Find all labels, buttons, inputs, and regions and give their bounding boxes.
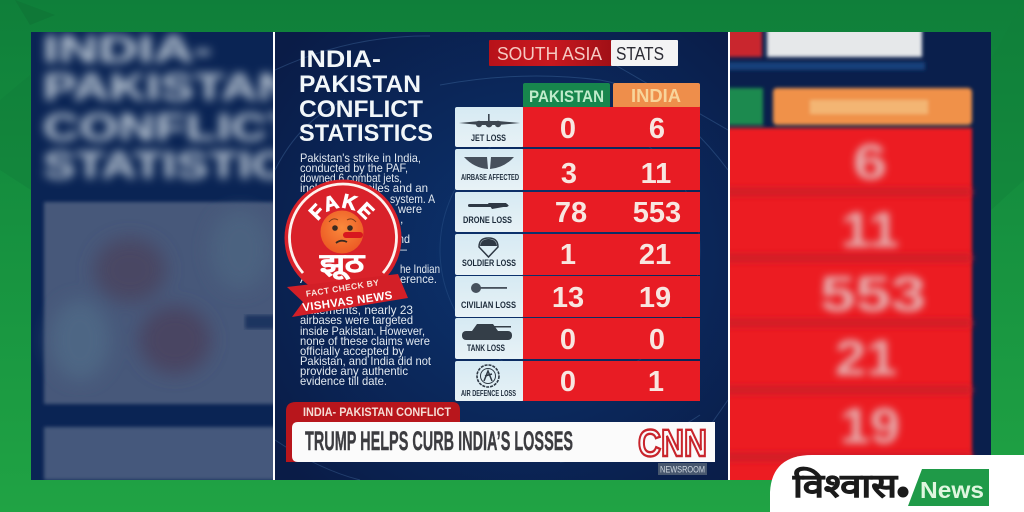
body text: , <box>400 212 403 226</box>
lower third news banner: INDIA- PAKISTAN CONFLICT <box>303 407 451 419</box>
body text: downed 6 combat jets, <box>300 171 402 185</box>
lower third news banner <box>286 402 715 475</box>
blurred right panel: 21 <box>835 330 897 386</box>
table row: jet loss <box>455 107 700 147</box>
column header: pakistan <box>523 83 610 108</box>
table row: jet loss: 0 <box>560 113 576 145</box>
hindi word: jhooth: झूठ <box>319 248 366 280</box>
blurred right panel: 553 <box>820 266 926 322</box>
blurred right panel: 11 <box>841 202 899 258</box>
body text: statements, nearly 23 <box>300 303 413 317</box>
table row: airbase affected: AIRBASE AFFECTED <box>461 173 519 182</box>
lower third news banner: TRUMP HELPS CURB INDIA’S LOSSES <box>305 426 573 456</box>
body text: were <box>397 202 422 216</box>
blurred left panel: PAKISTAN <box>43 67 294 109</box>
hindi wordmark: विश्वास <box>792 466 899 505</box>
body text: A <box>300 272 308 286</box>
blurred right panel <box>725 28 991 488</box>
icon: liar face <box>320 210 364 254</box>
body text: he Indian <box>400 262 440 276</box>
body text: evidence till date. <box>300 374 387 388</box>
body text <box>300 151 440 388</box>
body text: including missiles and an <box>300 181 428 195</box>
fake stamp badge <box>284 180 402 284</box>
table row: airbase affected: 11 <box>641 158 671 190</box>
table row: jet loss: 6 <box>649 113 665 145</box>
table row: air defence loss: AIR DEFENCE LOSS <box>461 389 516 398</box>
body text: officially accepted by <box>300 344 404 358</box>
blurred left panel: INDIA- <box>43 29 212 71</box>
column header: pakistan: PAKISTAN <box>529 87 604 106</box>
table row: civilian loss: 13 <box>552 282 584 314</box>
newsroom tag: NEWSROOM <box>660 464 705 474</box>
icon: tank <box>462 324 512 340</box>
body text: conducted by the PAF, <box>300 161 408 175</box>
table row: civilian loss <box>455 276 700 317</box>
table row: civilian loss: CIVILIAN LOSS <box>461 300 516 310</box>
table row: soldier loss <box>455 234 700 275</box>
table row: drone loss: DRONE LOSS <box>463 215 512 225</box>
curved word: fake: FAKE <box>308 194 376 221</box>
table row: tank loss <box>455 318 700 359</box>
icon: helmet <box>479 238 498 257</box>
body text: Pakistan's strike in India, <box>300 151 421 165</box>
table row: airbase affected: 3 <box>561 158 577 190</box>
icon: shell <box>471 283 507 293</box>
body text: erence. <box>400 272 437 286</box>
ribbon: fact check by vishvas news: VISHVAS NEWS <box>302 290 393 314</box>
south asia stats banner: SOUTH ASIA <box>497 43 603 64</box>
table row: air defence loss <box>455 361 700 401</box>
title: STATISTICS <box>299 120 433 147</box>
ribbon: fact check by vishvas news <box>287 274 408 317</box>
table row: tank loss: 0 <box>649 324 665 356</box>
table row: air defence loss: 0 <box>560 366 576 398</box>
blurred right panel: 6 <box>853 134 887 190</box>
body text: nd <box>398 232 410 246</box>
blurred left panel: STATISTICS <box>43 145 319 187</box>
table row: soldier loss: 1 <box>560 239 576 271</box>
news tag <box>908 469 989 506</box>
table row: soldier loss: 21 <box>639 239 671 271</box>
title: CONFLICT <box>299 96 423 123</box>
icon: air defence emblem <box>477 365 499 387</box>
body text: airbases were targeted <box>300 313 413 327</box>
table row: drone loss: 78 <box>555 197 587 229</box>
body text: provide any authentic <box>300 364 408 378</box>
table row: drone loss: 553 <box>633 197 681 229</box>
body text: Pakistan, and India did not <box>300 354 432 368</box>
icon: wings <box>464 157 514 169</box>
vishvas news logo <box>770 455 1024 512</box>
table row: tank loss: 0 <box>560 324 576 356</box>
body text: inside Pakistan. However, <box>300 324 425 338</box>
table row: airbase affected <box>455 149 700 190</box>
table row: soldier loss: SOLDIER LOSS <box>462 258 516 268</box>
table row: tank loss: TANK LOSS <box>467 343 505 353</box>
blurred left panel <box>31 32 273 480</box>
title <box>299 46 433 147</box>
table row: jet loss: JET LOSS <box>471 133 506 143</box>
table row: air defence loss: 1 <box>648 366 664 398</box>
blurred left panel: CONFLICT <box>43 107 298 149</box>
white divider lines and center infographic <box>273 32 730 480</box>
table row: civilian loss: 19 <box>639 282 671 314</box>
news tag: News <box>920 477 984 503</box>
blurred right panel: 19 <box>840 398 900 454</box>
south asia stats banner <box>489 40 678 66</box>
ribbon: fact check by vishvas news: FACT CHECK BY <box>305 277 380 299</box>
body text: none of these claims were <box>300 334 430 348</box>
column header: india: INDIA <box>631 86 681 106</box>
south asia stats banner: STATS <box>616 43 664 64</box>
table row: drone loss <box>455 192 700 232</box>
icon: drone <box>468 203 509 209</box>
body text: — <box>399 242 407 256</box>
title: INDIA- <box>299 46 381 73</box>
column header: india <box>613 83 700 108</box>
title: PAKISTAN <box>299 71 421 98</box>
icon: jet <box>459 114 520 127</box>
body text: system. A <box>390 192 435 206</box>
logo: CNN: CNN <box>638 423 707 465</box>
